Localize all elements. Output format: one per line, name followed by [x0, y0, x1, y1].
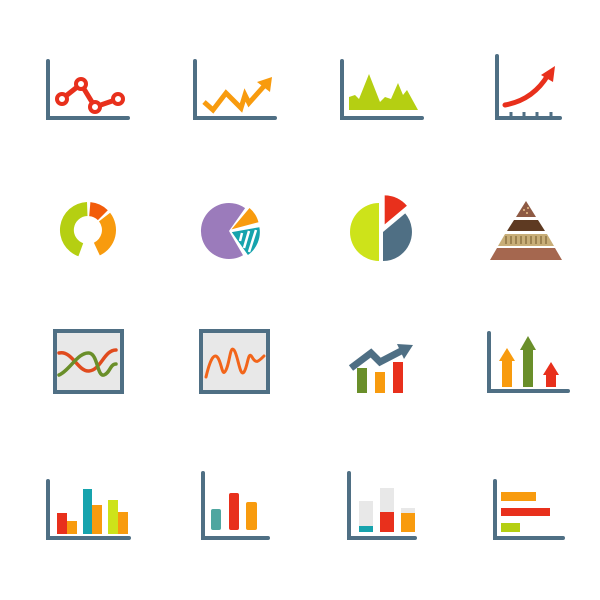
icon: line chart with dots [48, 61, 128, 118]
icon: pyramid [490, 201, 562, 260]
icon: pie chart purple [201, 203, 260, 259]
icon: simple bar chart [203, 473, 268, 538]
icon: stacked bar chart [349, 473, 415, 538]
icon: zigzag arrow chart [195, 61, 275, 118]
icon: oscillation box [201, 331, 268, 392]
icon: up arrows chart [489, 333, 568, 391]
icon: crossing waves box [55, 331, 122, 392]
icon: area chart [342, 61, 422, 118]
icon: pie chart split [350, 195, 412, 261]
icon: horizontal bar chart [495, 481, 563, 538]
icon: grouped bar chart [48, 481, 129, 538]
icon: growth curve [497, 56, 560, 118]
icon: donut chart [60, 202, 116, 256]
icon: bars with trend arrow [351, 344, 413, 393]
